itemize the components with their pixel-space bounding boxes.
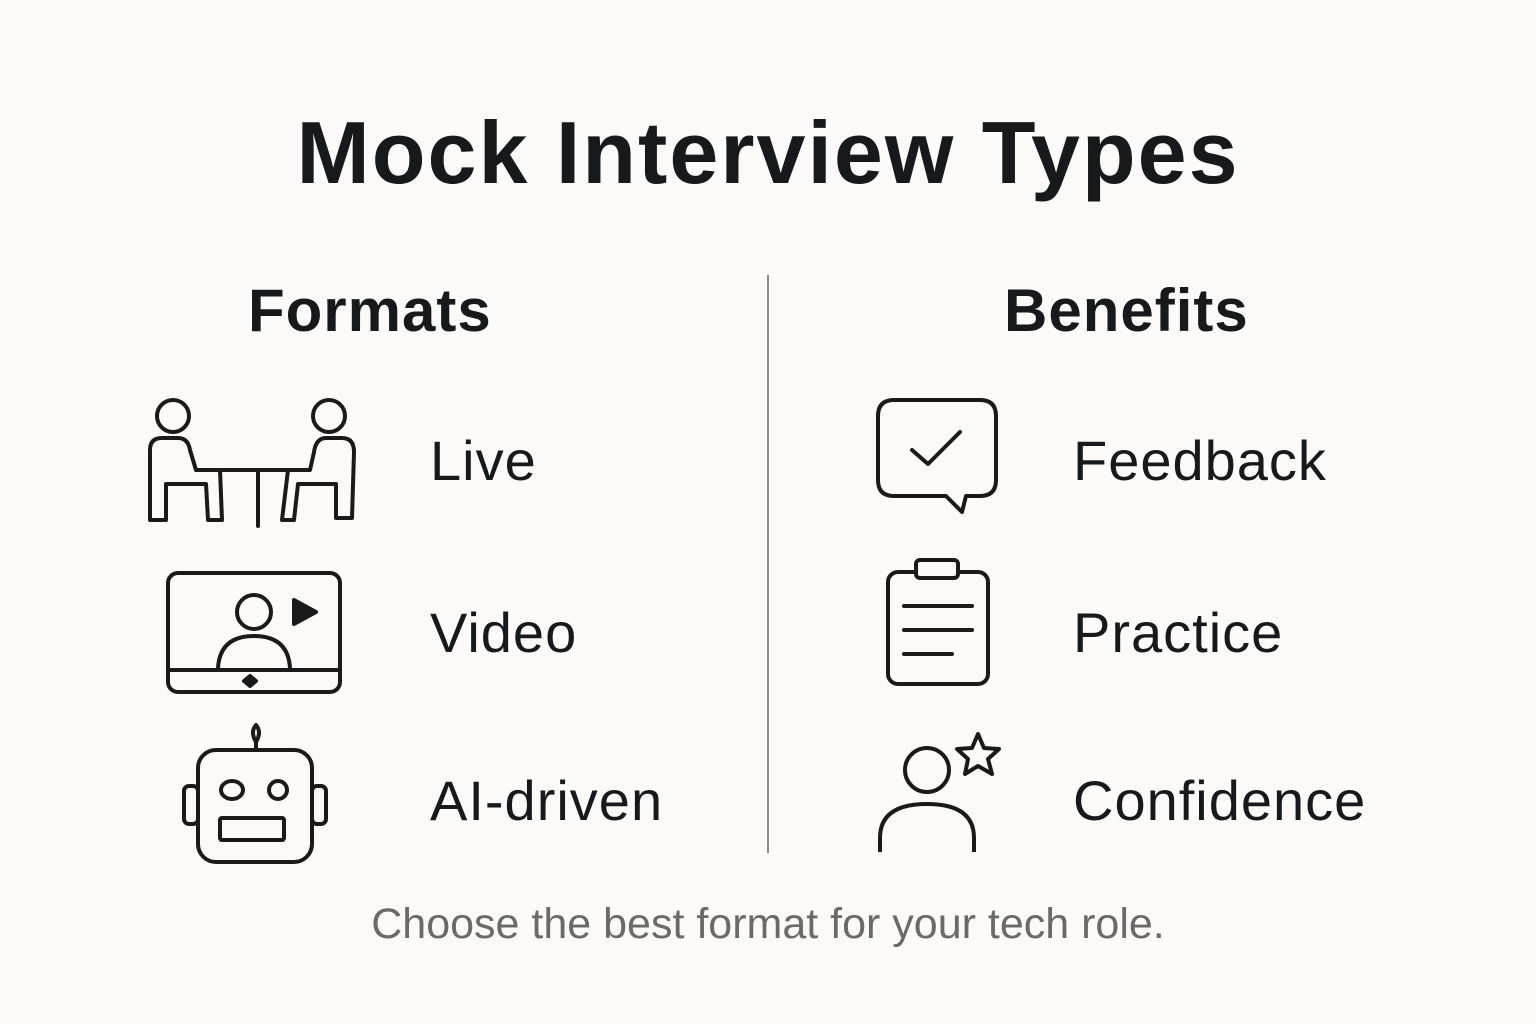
icon: video: [166, 571, 342, 694]
label: Video: Video: [430, 601, 577, 664]
icon: feedback bubble: [876, 398, 998, 514]
panel: benefits: [876, 277, 1366, 852]
title: Mock Interview Types: [296, 103, 1240, 202]
icon: robot: [182, 722, 328, 864]
icon: live interview: [148, 398, 356, 528]
icon: person with star: [878, 732, 1001, 852]
label: Feedback: Feedback: [1073, 429, 1327, 492]
panel: formats: [148, 277, 663, 864]
heading: Benefits: Benefits: [1004, 277, 1249, 344]
label: AI-driven: AI-driven: [430, 769, 663, 832]
label: Practice: Practice: [1073, 601, 1283, 664]
icon: clipboard: [886, 558, 990, 686]
label: Confidence: Confidence: [1073, 769, 1366, 832]
label: Live: Live: [430, 429, 537, 492]
footer text: Choose the best format for your tech role.: [371, 900, 1165, 948]
heading: Formats: Formats: [248, 277, 492, 344]
divider: [767, 275, 769, 853]
